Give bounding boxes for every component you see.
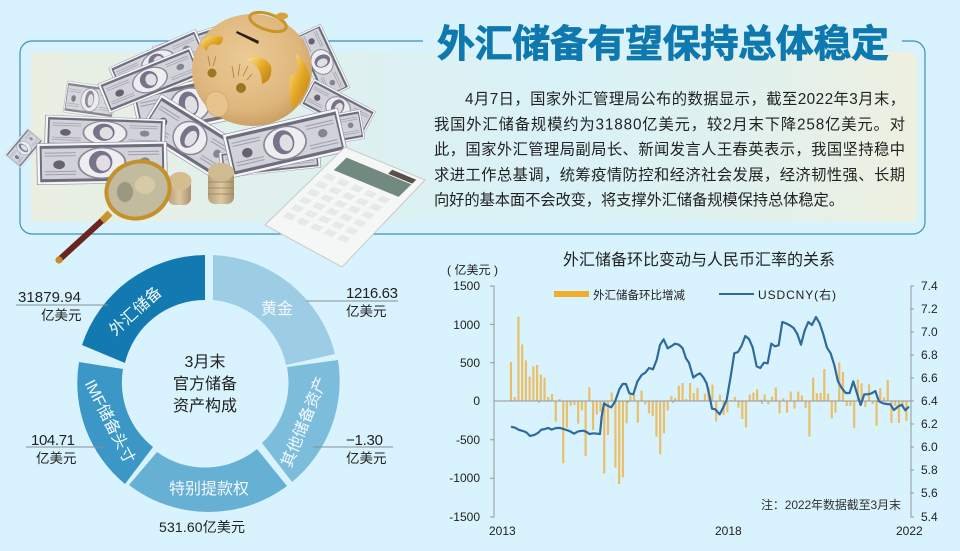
left axis: 1500 <box>453 279 480 293</box>
chart title: 外汇储备环比变动与人民币汇率的关系 <box>563 251 835 269</box>
left axis: -1000 <box>449 471 480 485</box>
segment: 外汇储备 <box>82 255 205 363</box>
right axis: 6.4 <box>921 394 938 408</box>
icon: calculator <box>265 147 425 267</box>
callout: 外汇储备 value: 亿美元 <box>41 308 82 323</box>
donut centre label: 资产构成 <box>173 397 237 415</box>
callout: 黄金 value <box>306 285 398 319</box>
legend: USDCNY(右) <box>758 287 836 302</box>
icon: magnifying glass <box>55 153 178 264</box>
text block: intro paragraph: 向好的基本面不会改变，将支撑外汇储备规模保持总体稳定。 <box>434 192 844 209</box>
right axis: 5.8 <box>921 463 938 477</box>
left axis <box>449 279 494 524</box>
left axis: 500 <box>460 356 480 370</box>
left axis: -1500 <box>449 510 480 524</box>
callout: IMF value <box>26 432 105 466</box>
segment: 其他储备资产: 其他储备资产 <box>278 374 331 470</box>
right axis: 6.6 <box>921 371 938 385</box>
combo chart: reserves change and USDCNY <box>447 262 938 538</box>
callout: 其他储备资产 value: −1.30 <box>346 432 383 449</box>
zero line <box>494 401 911 404</box>
segment: 其他储备资产 <box>262 360 340 482</box>
segment: 黄金: 黄金 <box>261 300 293 318</box>
right axis: 7.2 <box>921 302 938 316</box>
donut chart: official reserve assets <box>77 255 340 512</box>
text block: intro paragraph: 求进工作总基调，统筹疫情防控和经济社会发展，经济韧性强、长期 <box>434 167 905 184</box>
callout: 其他储备资产 value <box>313 432 393 466</box>
x axis labels: 2013 <box>489 524 516 538</box>
segment: IMF储备头寸 <box>77 362 153 484</box>
line: USDCNY <box>511 317 909 436</box>
text block: intro paragraph <box>434 91 905 209</box>
callout: 黄金 value: 1216.63 <box>346 285 398 302</box>
x axis labels: 2018 <box>715 524 742 538</box>
segment: 黄金 <box>213 255 335 365</box>
segment: 特别提款权 <box>129 449 287 512</box>
x axis labels <box>489 524 923 538</box>
legend <box>554 287 836 302</box>
text block: intro paragraph: 我国外汇储备规模约为31880亿美元，较2月末下降258亿美元。对 <box>434 115 905 133</box>
illustration: piggy bank, money, coins, magnifier, calculator <box>5 9 425 267</box>
callout: 外汇储备 value <box>16 289 108 323</box>
right axis: 7.4 <box>921 279 938 293</box>
panel: header frame <box>20 41 925 234</box>
note: 注：2022年数据截至3月末 <box>761 497 901 512</box>
donut centre label: 官方储备 <box>173 375 237 393</box>
right axis: 6.2 <box>921 417 938 431</box>
legend: 外汇储备环比增减 <box>593 288 686 302</box>
x axis labels: 2022 <box>896 524 923 538</box>
left axis: 0 <box>473 394 480 408</box>
callout: IMF value: 104.71 <box>31 432 75 449</box>
icon: coin stacks <box>168 163 234 205</box>
text block: intro paragraph: 此，国家外汇管理局副局长、新闻发言人王春英表示，我国坚持稳中 <box>434 140 905 158</box>
segment: 特别提款权: 特别提款权 <box>169 480 249 498</box>
callout: 特别提款权 value: 531.60亿美元 <box>159 519 245 535</box>
segment: IMF储备头寸: IMF储备头寸 <box>81 377 138 467</box>
axis unit label: ( 亿美元 ) <box>447 262 498 277</box>
icon: pile of dollar bills <box>5 24 376 185</box>
callout: 黄金 value: 亿美元 <box>346 304 386 319</box>
left axis: 1000 <box>453 318 480 332</box>
text block: intro paragraph: 4月7日，国家外汇管理局公布的数据显示，截至2022年3月末， <box>465 91 905 108</box>
title: 外汇储备有望保持总体稳定 <box>437 24 889 66</box>
callout: 外汇储备 value: 31879.94 <box>18 289 81 306</box>
right axis <box>911 279 938 524</box>
right axis: 7.0 <box>921 325 938 339</box>
right axis: 6.0 <box>921 440 938 454</box>
donut centre label <box>173 353 237 415</box>
right axis: 6.8 <box>921 348 938 362</box>
callout: IMF value: 亿美元 <box>36 451 76 466</box>
right axis: 5.4 <box>921 510 938 524</box>
segment: 外汇储备: 外汇储备 <box>106 283 165 339</box>
left axis: -500 <box>456 433 480 447</box>
icon: piggy bank <box>192 9 312 126</box>
donut centre label: 3月末 <box>185 353 225 371</box>
right axis: 5.6 <box>921 486 938 500</box>
callout: 其他储备资产 value: 亿美元 <box>346 451 386 466</box>
bars: monthly change in reserves <box>511 317 906 484</box>
